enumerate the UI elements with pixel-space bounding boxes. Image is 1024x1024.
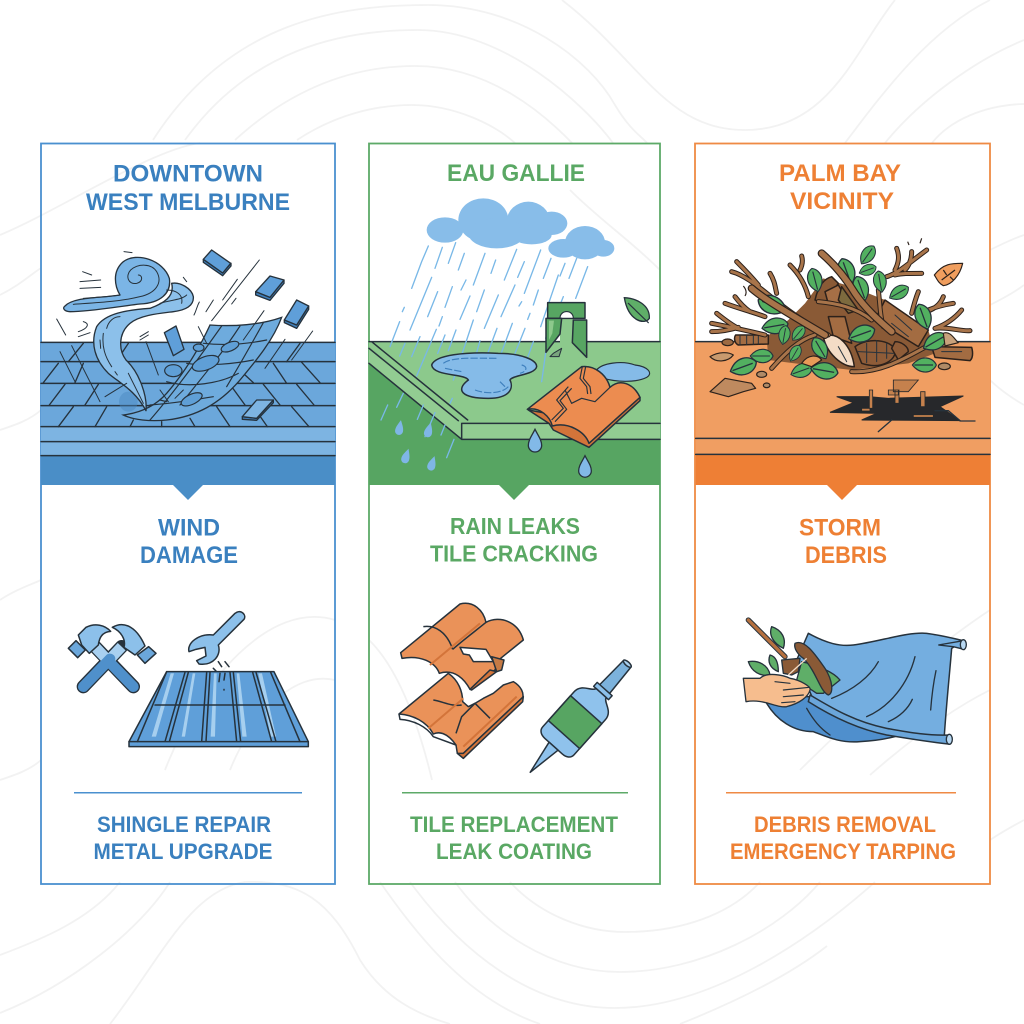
panel: Palm Bay Vicinity (695, 144, 990, 884)
logs (735, 277, 973, 367)
lower tile (399, 673, 523, 758)
panel: Eau Gallie (369, 144, 660, 884)
damage label (430, 513, 598, 566)
upper tile (401, 603, 523, 690)
debris pile backing (767, 278, 935, 370)
hand (743, 674, 810, 707)
panel: Downtown West Melbourne (41, 144, 335, 884)
rain (381, 243, 588, 458)
main branches (752, 253, 892, 335)
damage label (799, 514, 887, 569)
icon: cracked tiles (399, 603, 523, 758)
damage label: WIND (158, 514, 220, 542)
divider (402, 792, 628, 794)
icon: wrench (189, 612, 245, 664)
roof deck (369, 342, 660, 485)
heading: location: DOWNTOWN (113, 160, 263, 188)
repairs: TILE REPLACEMENT (410, 812, 619, 837)
tarp (767, 633, 966, 744)
divider (726, 792, 956, 794)
divider (74, 792, 302, 794)
arrow pointer (173, 485, 203, 500)
heading: location: VICINITY (790, 188, 894, 215)
damage label: DAMAGE (140, 542, 238, 569)
bark fragments, stones and stray leaves (710, 238, 963, 397)
icon: metal roof panel (129, 662, 308, 747)
repairs: EMERGENCY TARPING (730, 839, 956, 864)
repairs: DEBRIS REMOVAL (754, 812, 936, 837)
roof (41, 342, 335, 485)
repairs: LEAK COATING (436, 839, 592, 864)
falling leaf (624, 298, 649, 323)
illustration: storm debris on roof (696, 238, 990, 485)
lifted shingle sheet (123, 317, 282, 421)
roof (696, 342, 990, 485)
heading: location: WEST MELBURNE (86, 189, 290, 216)
illustration: rain on flat roof (369, 198, 660, 485)
roof vent (546, 303, 587, 357)
flying shingles (164, 250, 309, 420)
damage label (140, 514, 238, 569)
cracked roof tile (527, 366, 640, 447)
repairs (730, 812, 956, 864)
repairs (410, 812, 619, 864)
drips (394, 419, 591, 477)
clouds (427, 198, 614, 259)
damage label: RAIN LEAKS (450, 513, 580, 539)
branch and leaves (748, 620, 840, 695)
damage label: TILE CRACKING (430, 540, 598, 566)
illustration: wind tearing shingles (41, 250, 335, 485)
leaves (728, 243, 950, 381)
heading: location (779, 160, 901, 215)
icon: crossed hammers (68, 625, 156, 687)
heading: location: EAU GALLIE (447, 160, 585, 187)
arrow pointer (827, 485, 857, 500)
repairs (94, 812, 272, 864)
damage label: STORM (799, 514, 881, 542)
puddle (432, 353, 537, 398)
repairs: SHINGLE REPAIR (97, 812, 271, 837)
icon: sealant bottle (515, 648, 644, 786)
icon: hand tarping debris (743, 620, 966, 744)
repairs: METAL UPGRADE (94, 839, 272, 864)
heading: location: PALM BAY (779, 160, 901, 187)
heading: location (86, 160, 290, 216)
arrow pointer (499, 485, 529, 500)
wind swirl (57, 252, 313, 412)
branches (behind leaves) (712, 248, 970, 372)
small puddle (597, 363, 650, 381)
hole in roof (830, 380, 975, 432)
damage label: DEBRIS (805, 542, 887, 569)
